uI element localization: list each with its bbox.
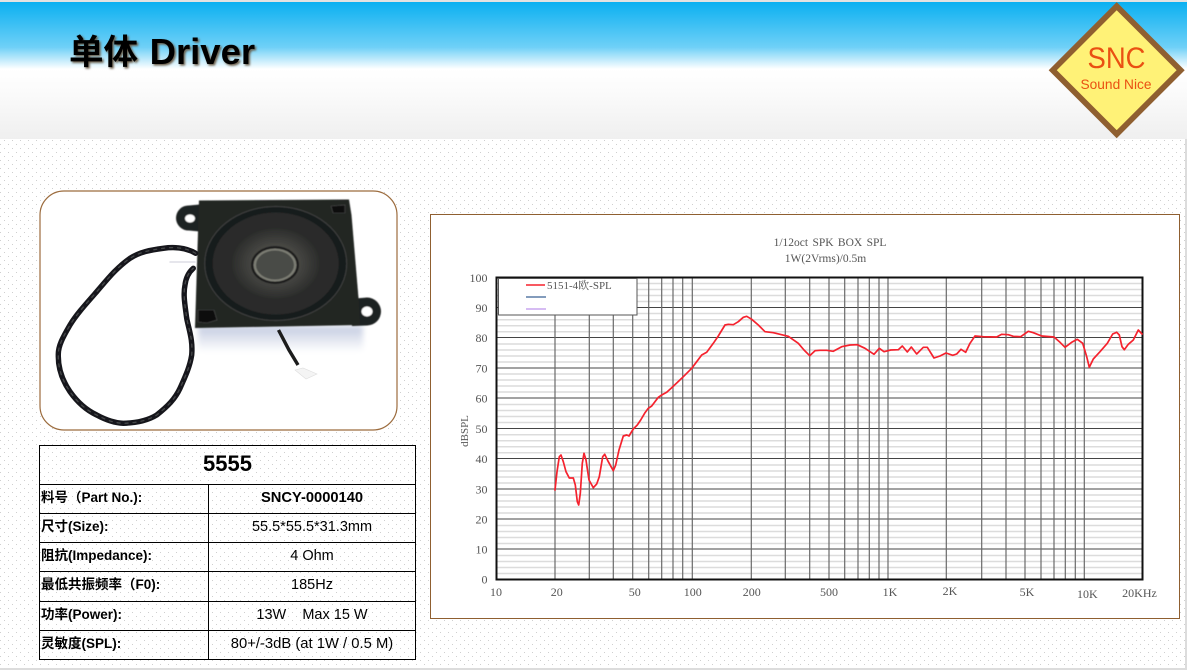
spec table: 阻抗(Impedance): xyxy=(41,548,152,562)
grid vertical xyxy=(555,277,1084,579)
y axis labels: 30 xyxy=(476,482,488,496)
y axis labels: 50 xyxy=(476,422,488,436)
icon: speaker assembly xyxy=(176,200,381,328)
spec table: 4 Ohm xyxy=(290,548,334,564)
legend xyxy=(498,278,637,315)
spec table: 13W Max 15 W xyxy=(256,606,368,622)
chart title xyxy=(774,237,886,265)
x axis labels: 10K xyxy=(1077,587,1098,601)
plot frame xyxy=(496,278,1142,580)
x axis labels: 200 xyxy=(743,585,761,599)
spec table: 55.5*55.5*31.3mm xyxy=(252,518,372,534)
x axis labels: 10 xyxy=(490,585,502,599)
y axis labels: 0 xyxy=(482,572,488,586)
chart title: 1W(2Vrms)/0.5m xyxy=(785,253,866,265)
spec table: 最低共振频率（F0): xyxy=(41,577,160,592)
y axis labels: 80 xyxy=(476,331,488,345)
spec table: 灵敏度(SPL): xyxy=(41,636,121,650)
y axis labels: 70 xyxy=(476,362,488,376)
spec table: 185Hz xyxy=(291,577,333,593)
x axis labels: 20 xyxy=(551,585,563,599)
icon: twisted wire xyxy=(58,248,196,423)
icon: speaker shadow xyxy=(198,326,363,352)
line: SPL curve xyxy=(555,316,1142,505)
legend: 5151-4欧-SPL xyxy=(547,278,612,292)
x axis labels: 20KHz xyxy=(1122,586,1157,600)
x axis labels: 500 xyxy=(820,585,838,599)
chart title: 1/12oct SPK BOX SPL xyxy=(774,237,886,249)
spec table: 5555 xyxy=(203,450,252,476)
x axis labels xyxy=(490,584,1157,601)
title: 单体 Driver xyxy=(69,31,255,72)
x axis labels: 2K xyxy=(943,584,958,598)
y axis labels: 90 xyxy=(476,301,488,315)
grid major horizontal xyxy=(496,308,1142,549)
icon: SNC logo diamond: Sound Nice xyxy=(1080,77,1152,92)
y axis labels xyxy=(470,271,488,586)
y axis labels: 100 xyxy=(470,271,488,285)
grid minor horizontal xyxy=(496,284,1142,574)
y axis title: dBSPL xyxy=(459,415,471,447)
x axis labels: 100 xyxy=(684,585,702,599)
icon: short wire and connector xyxy=(278,330,317,379)
x axis labels: 50 xyxy=(629,585,641,599)
spec table: 料号（Part No.): xyxy=(41,490,142,504)
y axis labels: 20 xyxy=(476,512,488,526)
spec table: 尺寸(Size): xyxy=(41,518,108,534)
x axis labels: 1K xyxy=(883,585,898,599)
y axis labels: 10 xyxy=(476,542,488,556)
header banner xyxy=(0,2,1187,139)
y axis labels: 40 xyxy=(476,452,488,466)
icon: SNC logo diamond: SNC xyxy=(1088,42,1146,75)
spec table: SNCY-0000140 xyxy=(261,490,363,506)
spec table xyxy=(39,445,416,660)
y axis labels: 60 xyxy=(476,392,488,406)
x axis labels: 5K xyxy=(1020,585,1035,599)
spec table: 80+/-3dB (at 1W / 0.5 M) xyxy=(231,636,393,652)
spec table: 功率(Power): xyxy=(41,606,122,622)
